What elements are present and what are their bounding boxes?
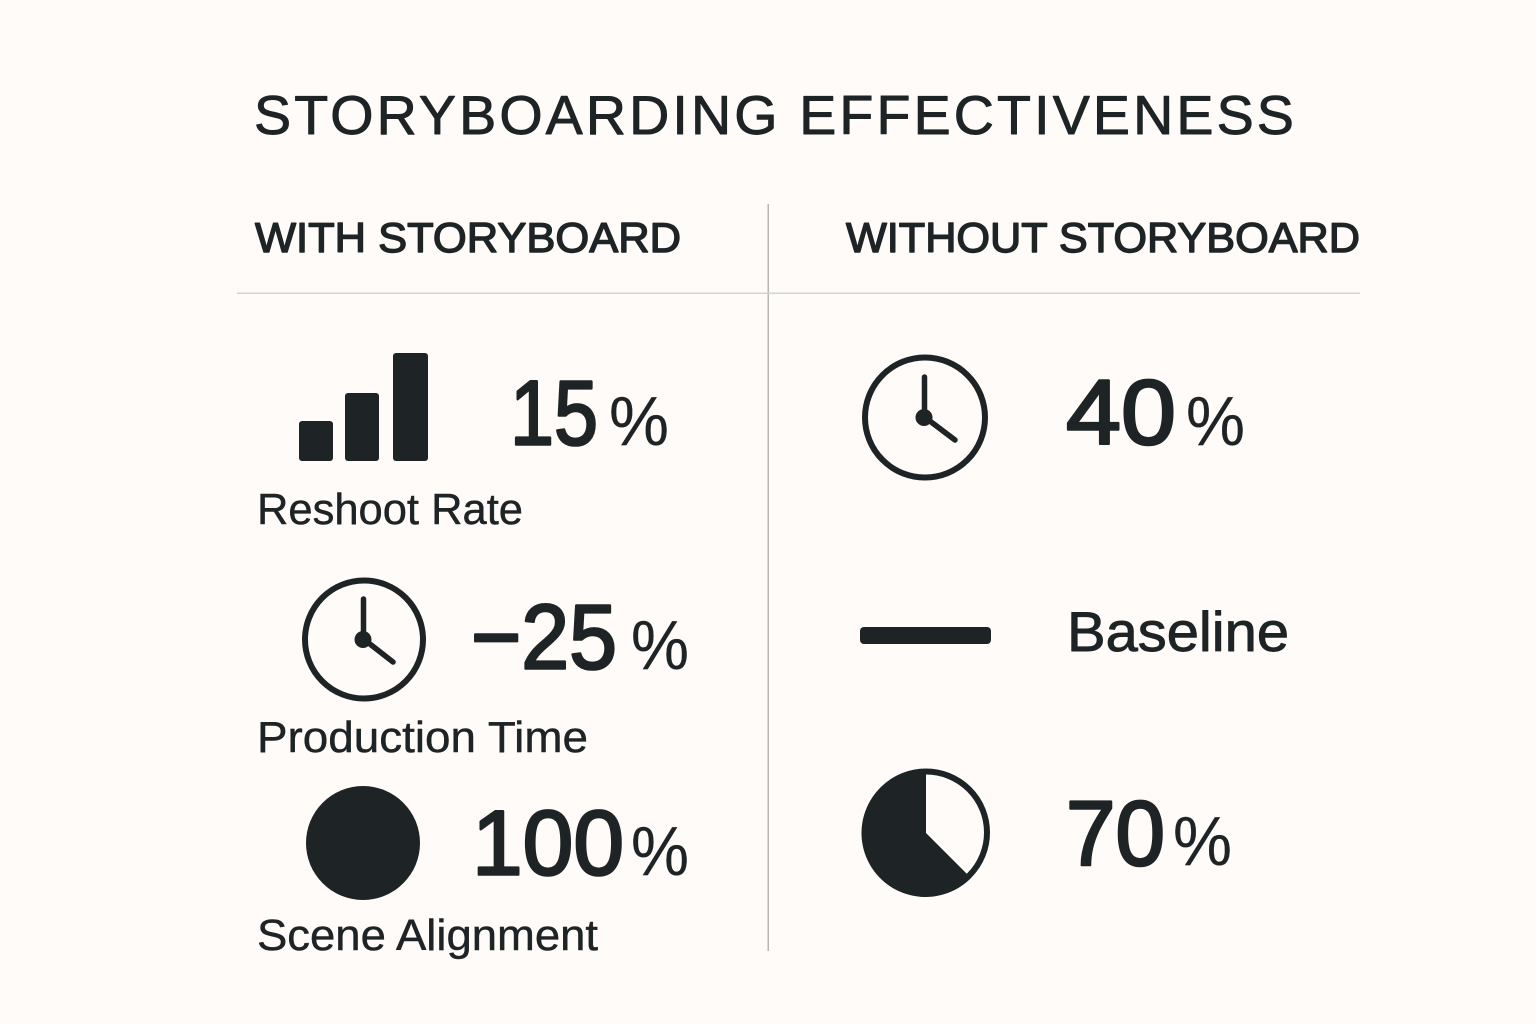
icon: pie chart — [861, 769, 987, 897]
value: 100%: 100 — [472, 792, 624, 894]
icon: clock — [865, 358, 985, 478]
title: STORYBOARDING EFFECTIVENESS — [254, 84, 1297, 146]
value: 15% — [510, 362, 669, 464]
label: reshoot rate: Reshoot Rate — [257, 485, 523, 534]
icon: clock — [305, 580, 423, 698]
icon: full circle — [306, 786, 420, 900]
value: 40% — [1066, 362, 1245, 464]
panel: with storyboard metrics — [257, 353, 689, 960]
label: baseline: Baseline — [1067, 600, 1289, 663]
value: 70% — [1066, 783, 1232, 885]
icon: bar chart — [299, 353, 428, 461]
value: 40%: % — [1186, 382, 1245, 460]
heading: without storyboard: WITHOUT STORYBOARD — [846, 214, 1360, 261]
value: 70%: % — [1173, 802, 1232, 880]
panel: without storyboard metrics — [860, 358, 1289, 897]
value: 15%: 15 — [510, 362, 598, 464]
value: 15%: % — [609, 382, 669, 460]
value: -25%: −25 — [471, 586, 617, 688]
heading: with storyboard: WITH STORYBOARD — [255, 214, 681, 261]
icon: dash — [860, 627, 991, 644]
value: 40%: 40 — [1066, 362, 1176, 464]
label: scene alignment: Scene Alignment — [257, 911, 598, 960]
value: 100%: % — [631, 812, 689, 890]
value: -25%: % — [631, 606, 689, 684]
value: 70%: 70 — [1066, 783, 1165, 885]
label: production time: Production Time — [257, 713, 588, 762]
